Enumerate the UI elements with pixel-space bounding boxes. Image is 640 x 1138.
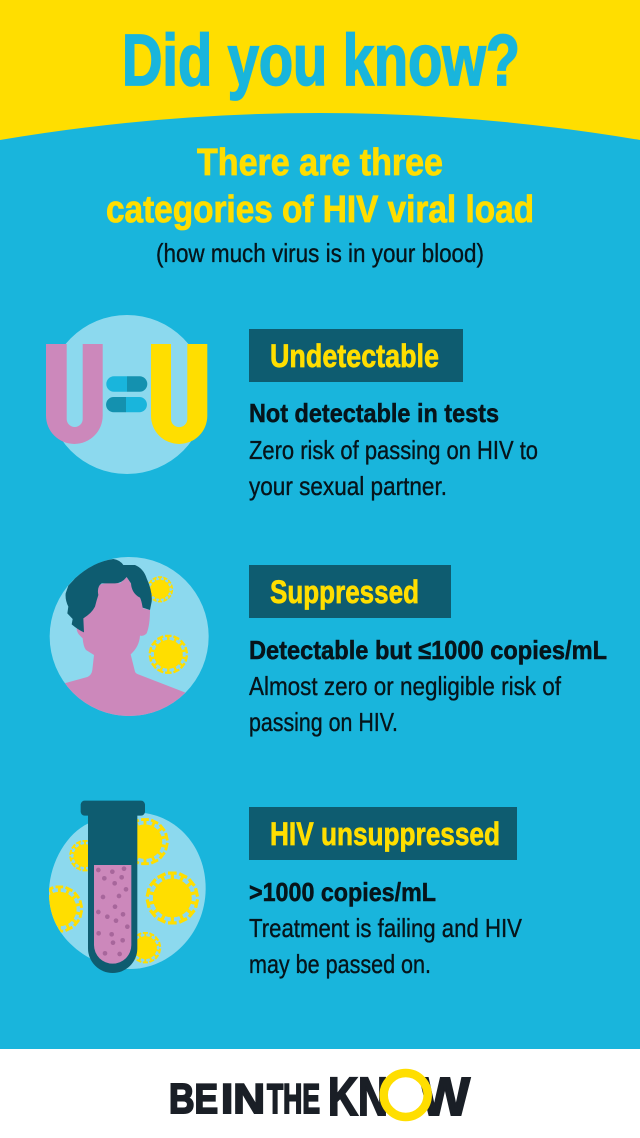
subtitle: categories of HIV viral load (106, 189, 534, 231)
logo: Be in the know: W (420, 1067, 470, 1127)
text: suppressed description: Almost zero or negligible risk of (249, 671, 562, 701)
panel: undetectable (249, 329, 538, 501)
text: undetectable description (249, 398, 538, 501)
text: unsuppressed description: >1000 copies/mL (249, 877, 436, 907)
logo: Be in the know: IN (221, 1075, 265, 1122)
label: Suppressed: Suppressed (270, 574, 419, 610)
panel: suppressed (249, 565, 607, 737)
label: HIV unsuppressed (249, 807, 517, 860)
text: unsuppressed description: Treatment is failing and HIV (249, 913, 523, 943)
label: Undetectable: Undetectable (270, 338, 439, 374)
text: undetectable description: Not detectable in tests (249, 398, 499, 428)
title: Did you know? (122, 21, 520, 101)
text: unsuppressed description: may be passed on. (249, 949, 431, 979)
icon: test tube with viruses (37, 801, 206, 973)
label: HIV unsuppressed: HIV unsuppressed (270, 816, 500, 852)
icon: person with virus (50, 557, 209, 732)
logo: Be in the know (169, 1067, 470, 1127)
text: unsuppressed description (249, 877, 523, 979)
text: undetectable description: your sexual partner. (249, 471, 447, 501)
text: suppressed description: passing on HIV. (249, 707, 398, 737)
footer band (0, 1049, 640, 1138)
subtitle: (how much virus is in your blood) (156, 238, 484, 268)
header banner (0, 0, 640, 140)
text: suppressed description: Detectable but ≤1000 copies/mL (249, 635, 607, 665)
text: suppressed description (249, 635, 607, 737)
subtitle: There are three (197, 142, 443, 184)
panel: HIV unsuppressed (249, 807, 523, 979)
label: Suppressed (249, 565, 451, 618)
label: Undetectable (249, 329, 463, 382)
logo: Be in the know: KN (328, 1067, 388, 1127)
logo: Be in the know: BE (169, 1075, 218, 1122)
text: undetectable description: Zero risk of passing on HIV to (249, 435, 538, 465)
subtitle (106, 142, 534, 268)
logo: Be in the know: THE (267, 1075, 320, 1122)
icon: U equals U (46, 315, 207, 474)
